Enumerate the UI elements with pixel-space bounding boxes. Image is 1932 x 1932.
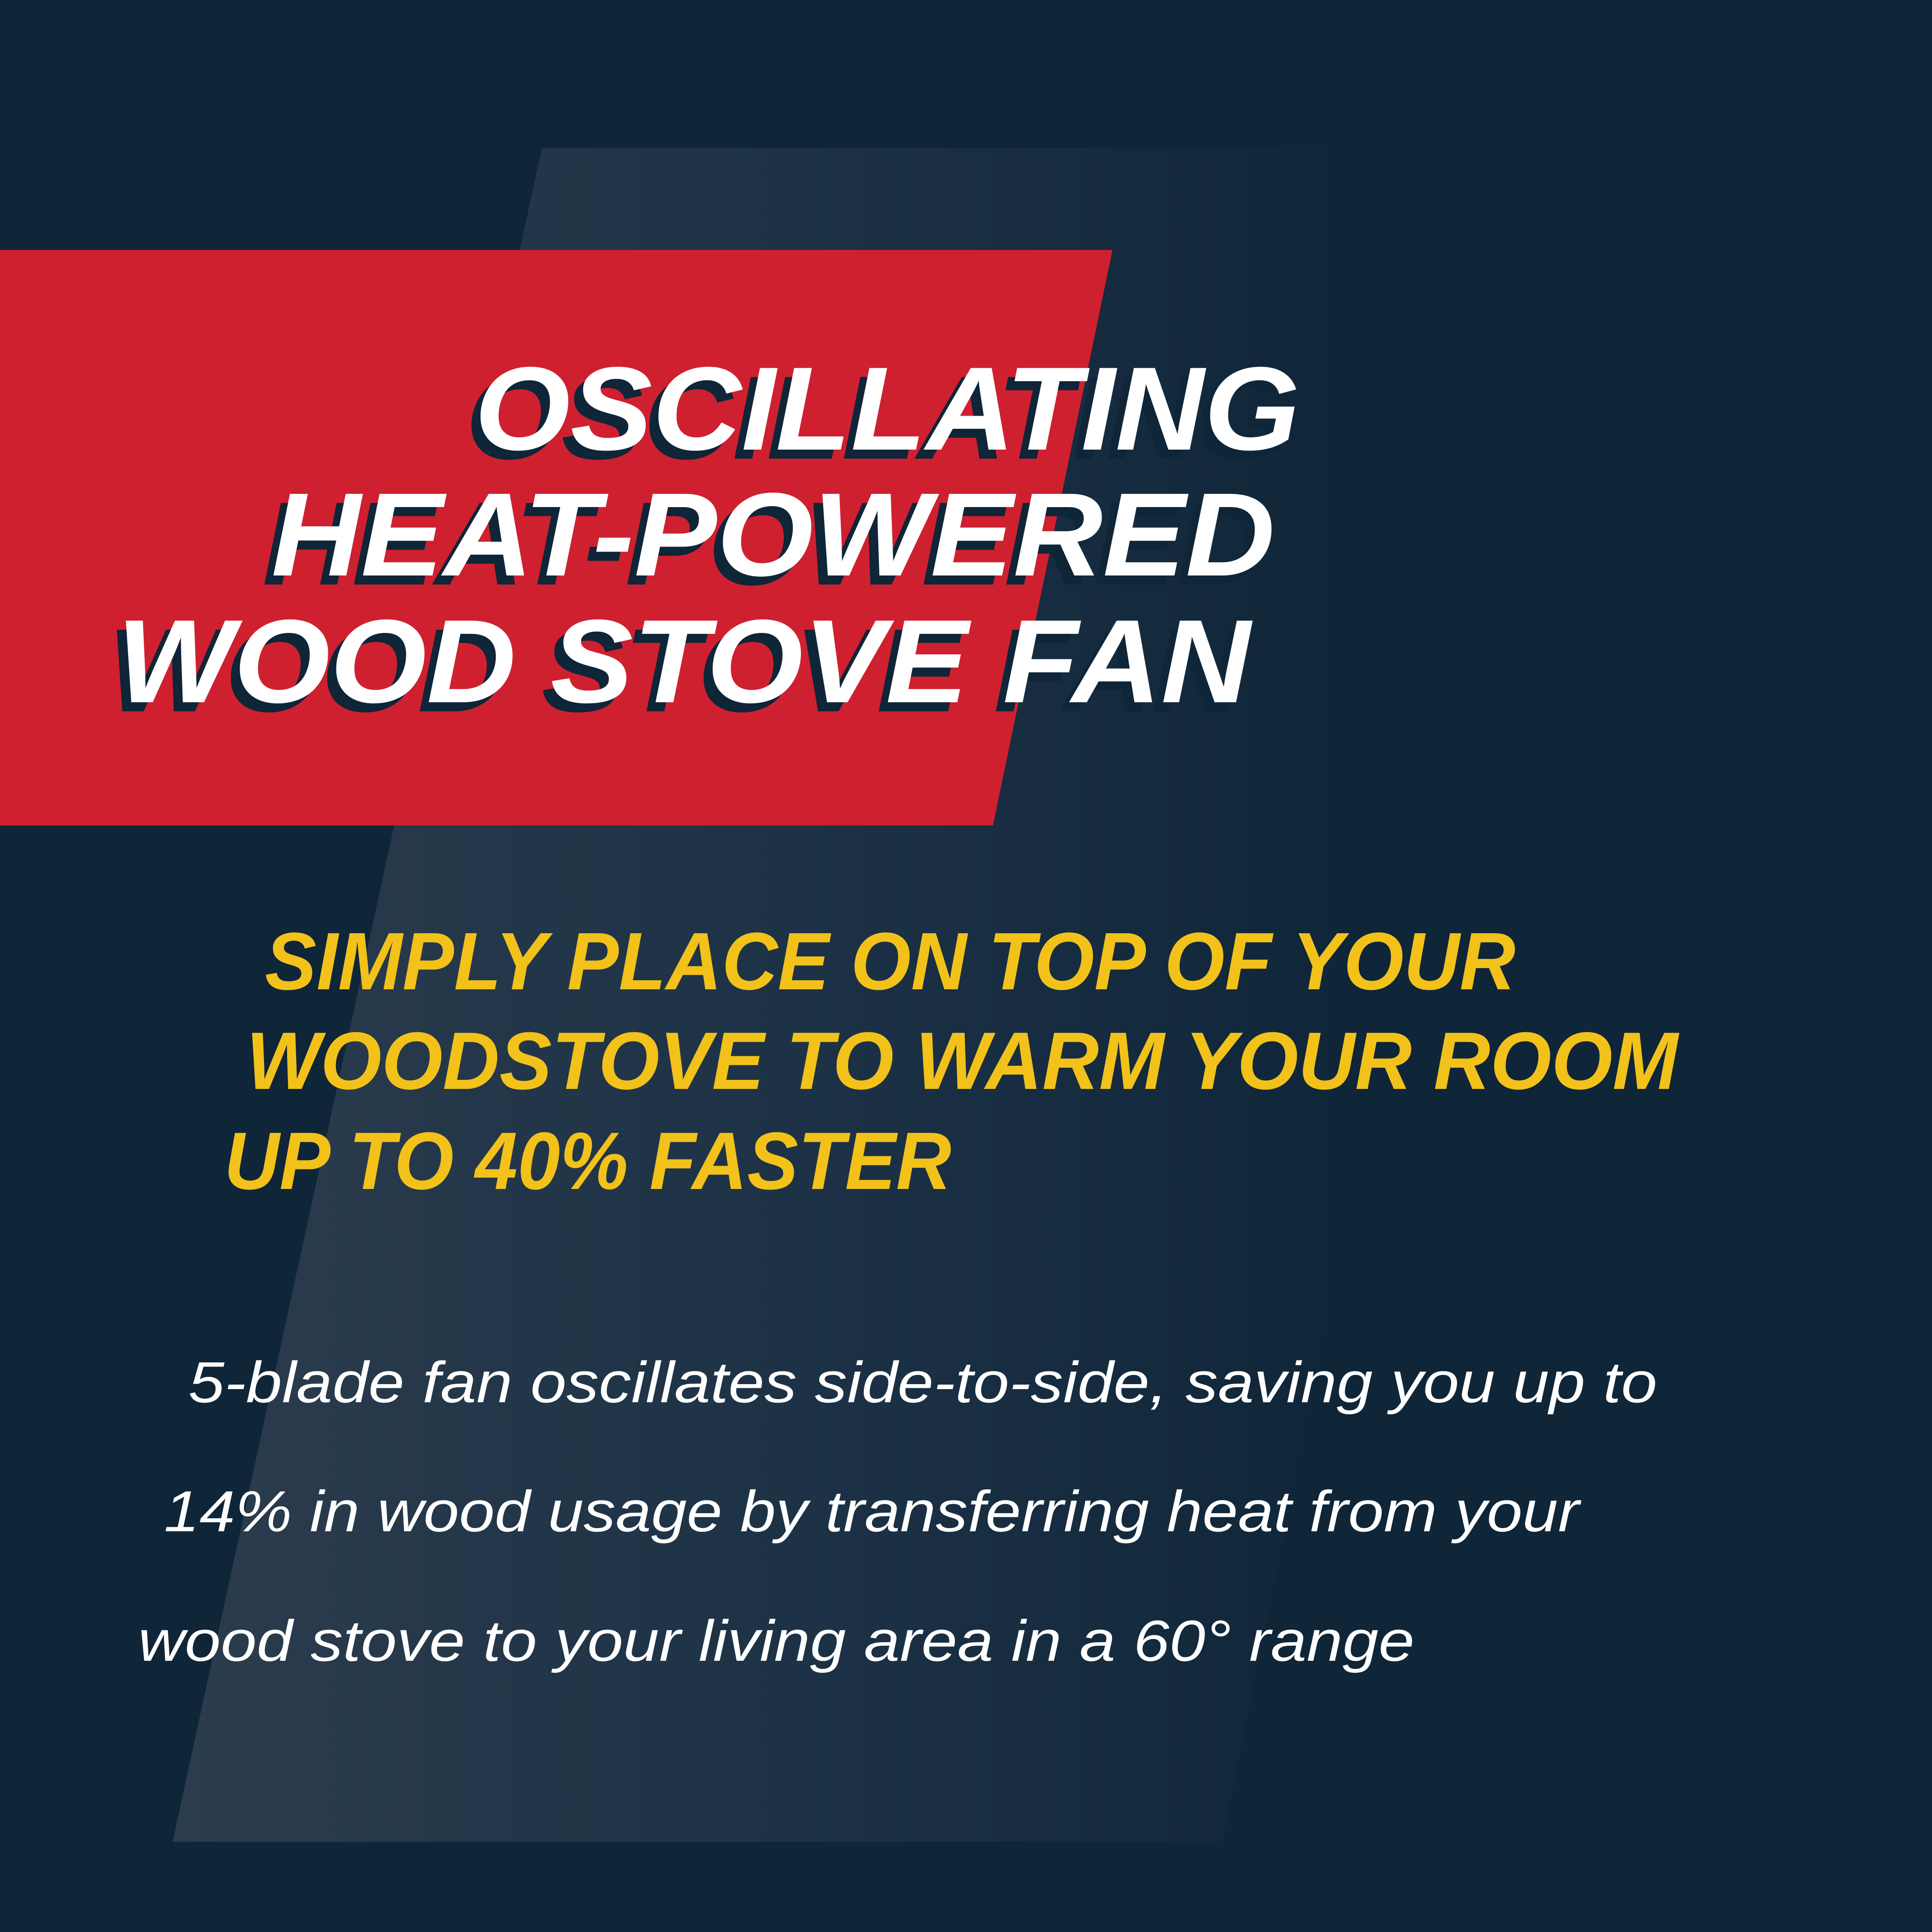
body text — [138, 1350, 1657, 1673]
yellow subheading: WOODSTOVE TO WARM YOUR ROOM — [246, 1016, 1680, 1107]
title: HEAT-POWERED — [271, 468, 1275, 601]
title: OSCILLATING — [475, 342, 1300, 475]
title — [108, 342, 1300, 737]
yellow subheading: UP TO 40% FASTER — [224, 1116, 951, 1207]
title: WOOD STOVE FAN — [108, 604, 1245, 737]
yellow subheading — [224, 916, 1680, 1207]
red title band — [0, 250, 1112, 825]
body text: 14% in wood usage by transferring heat from your — [164, 1479, 1582, 1544]
title: OSCILLATING — [465, 351, 1291, 484]
yellow subheading: SIMPLY PLACE ON TOP OF YOUR — [265, 916, 1515, 1007]
body text: wood stove to your living area in a 60° range — [138, 1609, 1414, 1673]
title: HEAT-POWERED — [262, 477, 1266, 610]
title: WOOD STOVE FAN — [117, 595, 1254, 728]
lighter slanted background panel — [173, 148, 1562, 1842]
body text: 5-blade fan oscillates side-to-side, saving you up to — [188, 1350, 1657, 1415]
